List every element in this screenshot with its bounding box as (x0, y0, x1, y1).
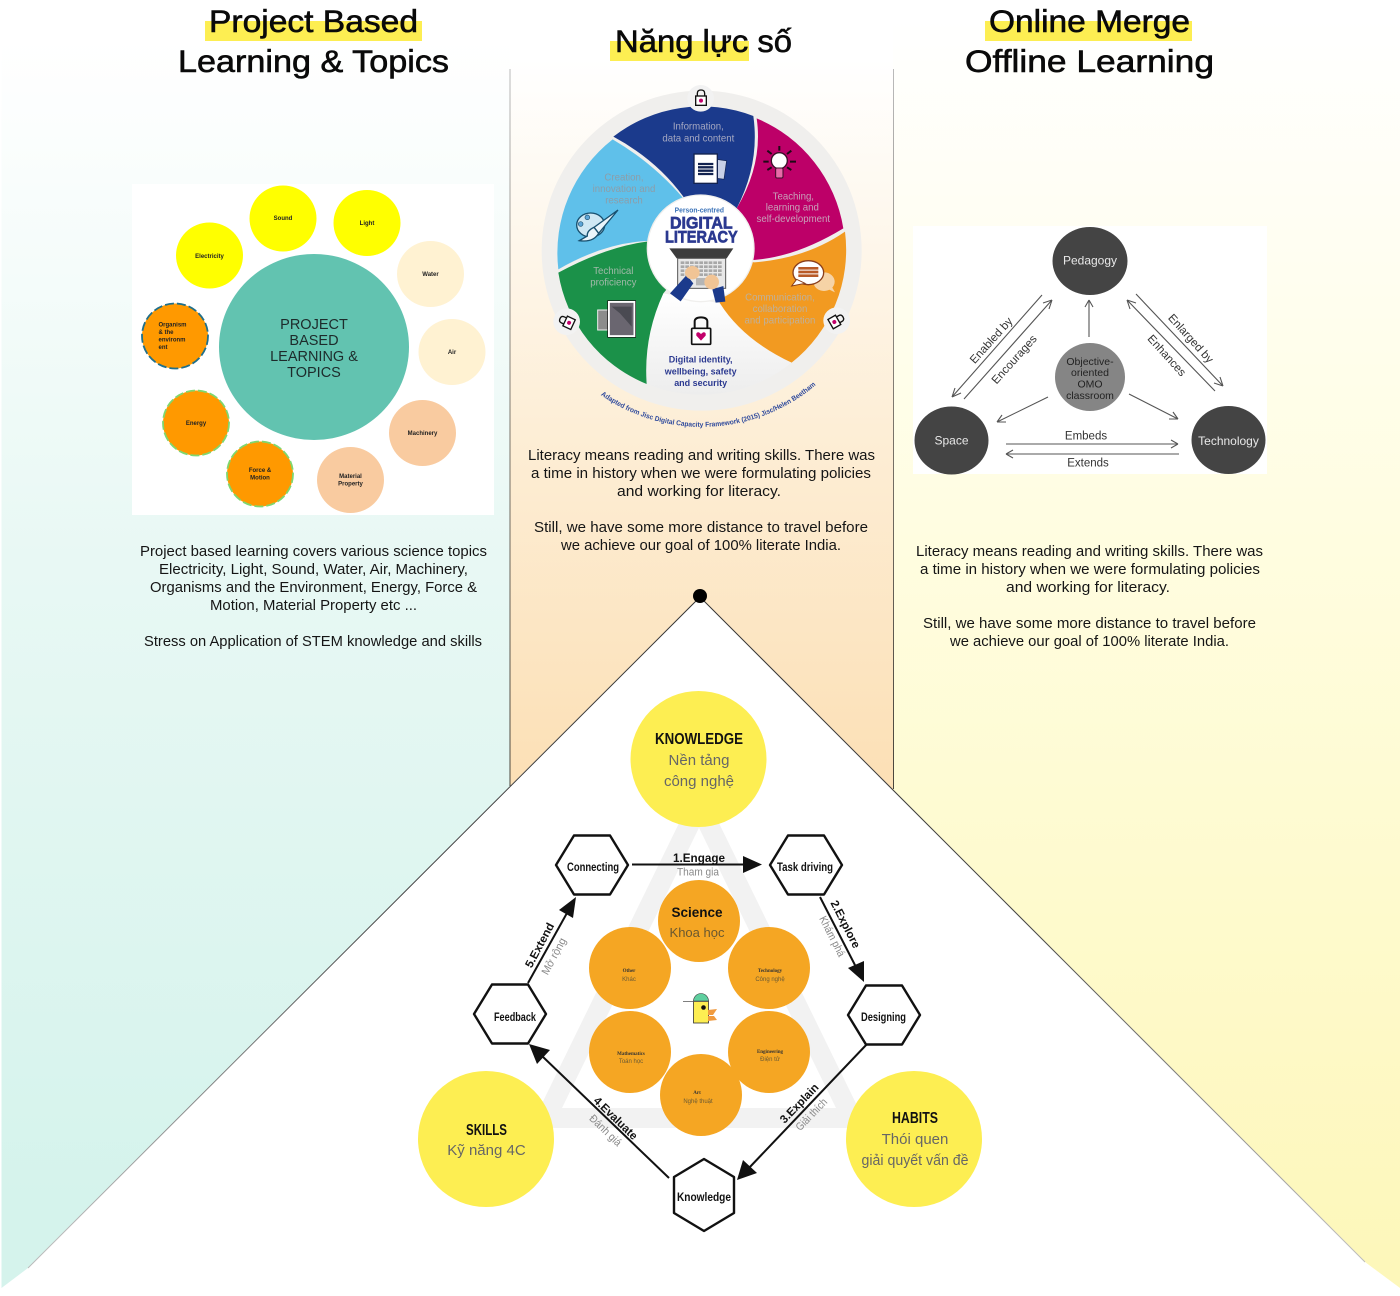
topic: Organism & the environment: & the (158, 330, 174, 336)
circle: Technology (728, 927, 810, 1009)
segment: digital identity (white) (646, 293, 792, 395)
triangle apex dot (693, 589, 707, 603)
middle panel right border (893, 69, 894, 789)
hexagon: Feedback: Feedback (494, 1010, 536, 1024)
segment: technical proficiency: Technical (593, 266, 633, 277)
node: Pedagogy: Pedagogy (1063, 254, 1117, 268)
segment: creation, innovation and research: research (605, 196, 643, 207)
segment: communication, collaboration and participation: and participation (745, 315, 815, 326)
hexagon: Knowledge: Knowledge (677, 1190, 731, 1204)
segment label: digital identity, wellbeing, safety and security (664, 317, 737, 388)
text block: OMO description: a time in history when we were formulating policies (920, 562, 1260, 578)
circle: Engineering: Điện tử (760, 1056, 780, 1063)
node: Space: Space (934, 434, 969, 448)
arrow: 1.Engage: 1.Engage (673, 853, 725, 865)
arrow: 3.Explain: Giải thích (794, 1096, 830, 1133)
label: Enlarged by: Enlarged by (1165, 312, 1215, 366)
arrow: 2.Explore: 2.Explore (828, 899, 862, 951)
segment: communication, collaboration and participation: collaboration (753, 304, 807, 315)
topic: Light (334, 190, 400, 256)
label: Extends: Extends (1067, 458, 1109, 470)
topic: Force & Motion: Motion (250, 476, 270, 482)
label: Embeds: Embeds (1065, 430, 1107, 442)
topic: Force & Motion: Force & (249, 468, 272, 474)
icon: left lock (553, 308, 580, 335)
topic: Energy (163, 390, 229, 456)
topic: Energy: Energy (186, 421, 207, 427)
segment: creation, innovation and research: Creation, (604, 172, 644, 183)
topic: Water (397, 241, 464, 307)
panel: project based learning topics diagram (132, 184, 494, 515)
node: Pedagogy (1052, 227, 1128, 295)
text block: OMO description: Still, we have some more distance to travel before (923, 616, 1256, 632)
segment label: digital identity, wellbeing, safety and security: Digital identity, (669, 355, 733, 365)
circle: Mathematics: Mathematics (617, 1052, 645, 1057)
topic: Material Property (317, 447, 384, 513)
panel: digital literacy wheel (542, 85, 862, 428)
text block: digital literacy description: a time in history when we were formulating policies (531, 466, 871, 482)
hexagon: Designing: Designing (861, 1010, 906, 1024)
panel: OMO classroom diagram (913, 226, 1267, 474)
segment: teaching, learning and self-development: Teaching, (773, 191, 814, 202)
arrow: 1.Engage (632, 853, 762, 878)
circle: Other: Other (623, 969, 636, 974)
segment label: digital identity, wellbeing, safety and security: wellbeing, safety (664, 366, 737, 376)
arrow: 3.Explain: 3.Explain (778, 1082, 822, 1126)
text block: OMO description: and working for literacy. (1006, 580, 1170, 596)
text block: digital literacy description: we achieve our goal of 100% literate India. (560, 538, 841, 554)
topic: Force & Motion (227, 442, 293, 506)
topic: Organism & the environment (142, 304, 208, 368)
heading: Project Based Learning & Topics: Learning & Topics (178, 43, 449, 79)
label: Encourages: Encourages (990, 333, 1040, 387)
centre circle: digital literacy: Person-centred (675, 207, 724, 214)
circle: Mathematics (589, 1011, 671, 1093)
node: Objective-oriented OMO classroom (1055, 343, 1125, 411)
heading: Project Based Learning & Topics (178, 3, 449, 79)
outer ring (542, 91, 862, 411)
text block: project based learning description: Motion, Material Property etc ... (210, 598, 417, 614)
central circle: TOPICS (287, 365, 341, 381)
segment: information, data and content: data and content (662, 133, 735, 144)
circle: Art: Art (693, 1091, 701, 1096)
arrow: 4.Evaluate (529, 1044, 669, 1178)
arrow: 2.Explore (816, 897, 864, 982)
chart: STEM learning triangle (418, 691, 982, 1231)
middle panel left border (510, 69, 511, 786)
text block: OMO description (916, 544, 1263, 650)
segment: technical proficiency (558, 242, 701, 384)
hexagon: Connecting (556, 836, 628, 894)
circle: Knowledge (630, 691, 766, 827)
hexagon: Connecting: Connecting (567, 860, 619, 874)
text block: digital literacy description: and working for literacy. (617, 484, 781, 500)
node: Technology (1192, 406, 1266, 474)
text block: OMO description: we achieve our goal of 100% literate India. (949, 634, 1229, 650)
circle: Technology: Technology (758, 969, 783, 974)
node: Objective-oriented OMO classroom: OMO (1077, 378, 1103, 390)
heading: Năng lực số: Năng lực số (615, 23, 792, 59)
label: Enhances: Enhances (1145, 333, 1188, 379)
segment: communication, collaboration and participation (701, 232, 846, 363)
topic: Material Property: Material (339, 474, 362, 480)
hexagon: Task driving: Task driving (777, 860, 833, 874)
topic: Machinery: Machinery (408, 431, 438, 437)
node: Space (914, 406, 988, 474)
circle: Skills: SKILLS (466, 1122, 507, 1139)
circle: Science (658, 880, 740, 962)
topic: Organism & the environment: environm (158, 338, 186, 344)
centre circle: digital literacy: DIGITAL (670, 214, 733, 233)
text block: project based learning description (140, 544, 487, 650)
hexagon: Knowledge (674, 1159, 734, 1231)
centre circle: digital literacy (647, 195, 754, 303)
circle: Art (660, 1054, 742, 1136)
segment: communication, collaboration and participation: Communication, (745, 292, 815, 303)
circle: Habits (846, 1071, 982, 1207)
topic: Air (418, 319, 486, 385)
text block: project based learning description: Project based learning covers various science topics (140, 544, 487, 560)
segment: technical proficiency: proficiency (590, 278, 637, 289)
circle: Art: Nghệ thuật (683, 1099, 713, 1105)
topic: Electricity (176, 222, 243, 288)
grey triangle band (546, 805, 852, 1118)
icon: top lock (687, 85, 714, 112)
text block: digital literacy description (528, 448, 875, 554)
segment: teaching, learning and self-development: learning and (766, 203, 819, 214)
icon: right lock (823, 307, 850, 334)
segment: creation, innovation and research (557, 139, 701, 269)
circle: Other: Khác (622, 977, 636, 983)
topic: Sound (250, 186, 316, 252)
segment: teaching, learning and self-development: self-development (757, 214, 830, 225)
arrow: 1.Engage: Tham gia (677, 866, 720, 878)
topic: Material Property: Property (338, 482, 363, 488)
segment label: digital identity, wellbeing, safety and security: and security (674, 378, 727, 388)
middle background panel (510, 0, 893, 790)
circle: Knowledge: KNOWLEDGE (655, 731, 743, 748)
circle: Habits: giải quyết vấn đề (862, 1152, 968, 1169)
central circle (219, 254, 409, 440)
triangle right edge (700, 597, 1365, 1262)
heading: Online Merge Offline Learning (965, 3, 1214, 79)
topic: Organism & the environment: Organism (158, 322, 187, 328)
circle: Skills (418, 1071, 554, 1207)
central circle: BASED (289, 333, 339, 349)
central circle: LEARNING & (270, 349, 358, 365)
circle: Habits: Thói quen (882, 1131, 948, 1148)
triangle left edge (28, 597, 700, 1268)
topic: Water: Water (422, 272, 439, 278)
text block: project based learning description: Electricity, Light, Sound, Water, Air, Machinery, (159, 562, 468, 578)
circle: Engineering: Engineering (757, 1050, 784, 1055)
topic: Machinery (389, 400, 456, 466)
hexagon: Designing (848, 986, 920, 1044)
circle: Technology: Công nghệ (755, 977, 785, 983)
heading: Online Merge Offline Learning: Online Merge (989, 3, 1190, 39)
circle: Knowledge: Nền tảng (669, 752, 729, 769)
hexagon: Task driving (770, 836, 842, 894)
node: Technology: Technology (1198, 434, 1259, 448)
topic: Organism & the environment: ent (158, 345, 168, 351)
text block: project based learning description: Stress on Application of STEM knowledge and skills (144, 634, 482, 650)
topic: Electricity: Electricity (195, 254, 225, 260)
arrow: 3.Explain (737, 1043, 868, 1180)
circle: Science: Khoa học (670, 925, 725, 940)
segment: information, data and content (613, 106, 755, 248)
arrows between nodes (952, 294, 1223, 458)
hexagon: Feedback (474, 984, 546, 1044)
circle: Engineering (728, 1011, 810, 1093)
node: Objective-oriented OMO classroom: classroom (1066, 390, 1114, 402)
label: Enabled by: Enabled by (968, 315, 1016, 366)
arrow: 4.Evaluate: Đánh giá (587, 1113, 624, 1150)
segment: information, data and content: Information, (673, 122, 724, 133)
circle: Mathematics: Toán học (619, 1059, 643, 1065)
segment: creation, innovation and research: innovation and (593, 184, 655, 195)
topic: Sound: Sound (274, 216, 293, 222)
circle: Science: Science (671, 905, 723, 920)
node: Objective-oriented OMO classroom: oriented (1071, 367, 1109, 379)
central circle: PROJECT (280, 317, 348, 333)
credit line on arc: Adapted from Jisc Digital Capacity Framework (2015) Jisc/Helen Beetham (600, 382, 816, 428)
topic: Light: Light (360, 221, 374, 227)
topic: Air: Air (448, 350, 457, 356)
circle: Habits: HABITS (892, 1110, 938, 1127)
arrow: 5.Extend: Mở rộng (540, 936, 569, 977)
circle: Skills: Kỹ năng 4C (447, 1142, 526, 1159)
node: Objective-oriented OMO classroom: Objective- (1066, 356, 1114, 368)
left background panel (2, 0, 510, 1288)
heading: Online Merge Offline Learning: Offline Learning (965, 43, 1214, 79)
circle: Knowledge: công nghệ (664, 773, 734, 790)
arrow: 4.Evaluate: 4.Evaluate (591, 1095, 639, 1143)
arrow: 5.Extend (524, 897, 576, 983)
heading: Project Based Learning & Topics: Project Based (209, 3, 418, 39)
text block: OMO description: Literacy means reading and writing skills. There was (916, 544, 1263, 560)
centre circle: digital literacy: LITERACY (665, 228, 738, 247)
text block: digital literacy description: Still, we have some more distance to travel before (534, 520, 868, 536)
circle: Other (589, 927, 671, 1009)
segment: teaching, learning and self-development (701, 118, 843, 260)
right background panel (893, 0, 1400, 1288)
text block: digital literacy description: Literacy means reading and writing skills. There was (528, 448, 875, 464)
arrow: 5.Extend: 5.Extend (524, 921, 557, 970)
arrow: 2.Explore: Khám phá (816, 914, 847, 960)
text block: project based learning description: Organisms and the Environment, Energy, Force & (150, 580, 477, 596)
icon: bird mascot (683, 994, 717, 1023)
